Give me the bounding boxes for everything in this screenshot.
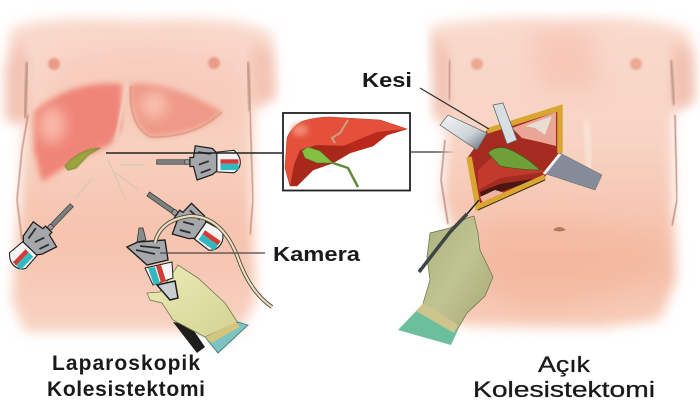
panel: liver inset — [283, 113, 410, 190]
incision — [468, 107, 560, 210]
bile duct — [333, 163, 358, 187]
panel: laparoscopic abdomen — [5, 18, 277, 332]
faint internal instruments — [76, 160, 145, 200]
gallbladder — [488, 148, 540, 170]
liver seen through skin — [34, 84, 222, 182]
icon: camera port — [127, 228, 178, 300]
line: laparoscope to inset — [106, 152, 283, 154]
navel — [553, 227, 566, 232]
torso skin — [5, 18, 277, 332]
torso skin — [432, 18, 694, 328]
title: Açık Kolesistektomi: Kolesistektomi — [473, 377, 655, 402]
icon: top retractor — [493, 103, 517, 144]
icon: left retractor — [440, 115, 487, 150]
label: Kamera: Kamera — [273, 243, 361, 266]
icon: middle laparoscopic port — [137, 180, 230, 260]
title: Laparoskopik Kolesistektomi: Laparoskopik — [52, 352, 200, 375]
icon: upper laparoscopic port — [157, 146, 240, 180]
icon: camera cable — [155, 216, 272, 307]
line: Kesi leader — [420, 88, 489, 129]
nipples — [48, 57, 220, 70]
incision yellow margins — [469, 108, 560, 207]
vessels — [332, 120, 348, 143]
title: Açık Kolesistektomi — [473, 352, 655, 402]
nipples — [471, 58, 642, 70]
label: Kesi: Kesi — [362, 69, 412, 92]
gallbladder — [302, 147, 333, 163]
icon: gloved hand holding camera — [147, 265, 248, 353]
icon: right retractor — [543, 153, 602, 190]
line: inset to gallbladder — [411, 151, 490, 153]
title: Açık Kolesistektomi: Açık — [538, 352, 591, 377]
panel: open abdomen — [432, 18, 694, 328]
liver — [285, 117, 407, 186]
icon: gloved hand with scalpel — [398, 200, 493, 345]
line: camera label leader — [160, 252, 265, 254]
title: Laparoskopik Kolesistektomi — [47, 352, 205, 401]
icon: left laparoscopic port — [2, 194, 85, 278]
gallbladder — [65, 148, 100, 170]
title: Laparoskopik Kolesistektomi: Kolesistektomi — [47, 378, 205, 401]
